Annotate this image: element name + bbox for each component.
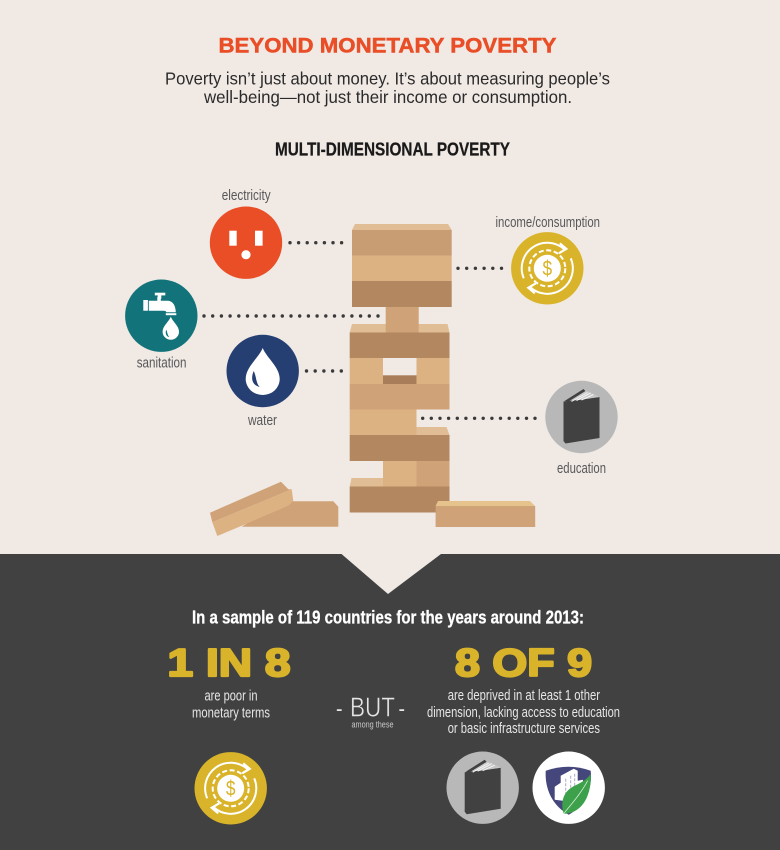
title: BEYOND MONETARY POVERTY bbox=[218, 33, 556, 57]
connector text: but among these: among these bbox=[352, 720, 394, 730]
connector text: but among these: BUT bbox=[350, 692, 395, 723]
stat text: are poor bbox=[192, 689, 270, 722]
stat text: are deprived: dimension, lacking access to education bbox=[427, 705, 620, 721]
intro text: well-being—not just their income or consumption. bbox=[203, 87, 572, 107]
label: income/consumption: income/consumption bbox=[496, 215, 600, 231]
icon: electricity outlet bbox=[210, 206, 282, 279]
dotted connector: education bbox=[421, 417, 537, 420]
connector text: but among these bbox=[336, 692, 405, 730]
label: sanitation: sanitation bbox=[137, 356, 186, 372]
stat text: are deprived: are deprived in at least 1 other bbox=[448, 688, 600, 704]
icon: income/consumption coin bbox=[511, 232, 584, 304]
label: water: water bbox=[247, 413, 277, 429]
icon: water drop bbox=[227, 335, 299, 407]
fallen block right bbox=[436, 501, 535, 527]
stat text: are deprived bbox=[427, 688, 620, 737]
icon: education book bottom bbox=[446, 752, 519, 824]
stat: 1 in 8: 1 IN 8 bbox=[168, 642, 290, 685]
stat text: are poor: monetary terms bbox=[192, 706, 270, 722]
icon: income coin bottom: $ bbox=[226, 777, 236, 800]
label: electricity: electricity bbox=[222, 188, 271, 204]
icon: sanitation tap bbox=[125, 280, 198, 352]
dotted connector: electricity bbox=[288, 241, 343, 244]
icon: infrastructure shield bbox=[532, 752, 605, 824]
dotted connector: water bbox=[305, 369, 343, 373]
label: education: education bbox=[557, 461, 606, 477]
icon: education book bbox=[545, 381, 618, 453]
stat text: are deprived: or basic infrastructure services bbox=[448, 721, 600, 737]
stat: 8 of 9: 8 OF 9 bbox=[455, 642, 592, 685]
statistics heading: In a sample of 119 countries for the years around 2013: bbox=[192, 606, 584, 627]
fallen blocks left bbox=[210, 482, 338, 536]
dotted connector: income bbox=[456, 267, 503, 270]
heading: multi-dimensional poverty: MULTI-DIMENSIONAL POVERTY bbox=[275, 140, 510, 160]
intro text bbox=[165, 68, 610, 107]
icon: income/consumption coin: $ bbox=[542, 257, 552, 280]
intro text: Poverty isn’t just about money. It’s about measuring people’s bbox=[165, 68, 610, 88]
panel: dark statistics bbox=[0, 554, 780, 850]
connector text: but among these: - bbox=[336, 696, 342, 721]
connector text: but among these: - bbox=[398, 696, 405, 721]
icon: income coin bottom bbox=[194, 752, 267, 824]
stat text: are poor: are poor in bbox=[204, 689, 258, 705]
dotted connector: sanitation bbox=[202, 314, 380, 318]
jenga tower bbox=[350, 224, 452, 512]
